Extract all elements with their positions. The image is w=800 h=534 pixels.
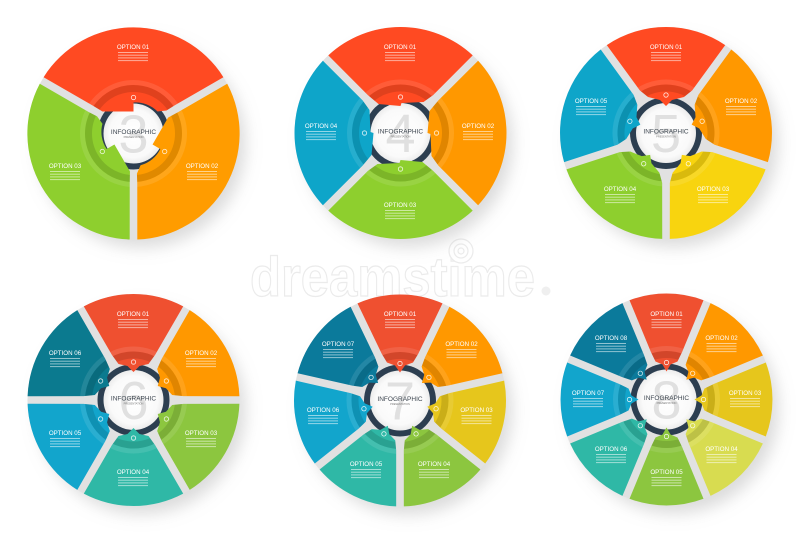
option 01: OPTION 01 <box>384 311 417 318</box>
option 03 <box>49 163 82 180</box>
option 04: OPTION 04 <box>305 123 338 130</box>
option 02: OPTION 02 <box>185 350 218 357</box>
option 01: OPTION 01 <box>117 311 150 318</box>
option 02 <box>445 341 478 358</box>
option 03: OPTION 03 <box>697 186 730 193</box>
option 02: OPTION 02 <box>462 123 495 130</box>
option 04 <box>418 461 451 478</box>
option 04: OPTION 04 <box>705 446 738 453</box>
option 03: OPTION 03 <box>185 430 218 437</box>
option 04 <box>117 469 150 486</box>
option 01 <box>117 44 150 61</box>
option 05: OPTION 05 <box>350 461 383 468</box>
chart 8 center text: 8 <box>651 370 682 430</box>
option 03 <box>185 430 218 447</box>
option 02 <box>725 98 758 115</box>
option 02 <box>185 350 218 367</box>
option 05 <box>350 461 383 478</box>
chart: 4 options <box>294 27 512 247</box>
chart 8 wheel <box>556 289 778 514</box>
option 03 <box>729 390 762 407</box>
option 06: OPTION 06 <box>307 407 340 414</box>
option 03: OPTION 03 <box>460 407 493 414</box>
option 06 <box>595 446 628 463</box>
chart 4 center text: 4 <box>385 104 416 164</box>
chart 3 center text: 3 <box>118 104 149 164</box>
chart 6 center text: 6 <box>118 371 149 431</box>
option 02 <box>462 123 495 140</box>
chart 3 center text <box>111 104 156 164</box>
option 01 <box>650 44 683 61</box>
option 05: OPTION 05 <box>575 98 608 105</box>
option 02: OPTION 02 <box>445 341 478 348</box>
option 02: OPTION 02 <box>186 163 219 170</box>
chart 5 wheel <box>547 27 785 254</box>
chart 6 center text <box>111 371 156 431</box>
chart: 6 options <box>16 294 251 514</box>
option 01 <box>117 311 150 328</box>
chart 7 center text: PRESENTATION <box>390 402 410 406</box>
chart 3 wheel <box>0 27 270 264</box>
option 01: OPTION 01 <box>650 44 683 51</box>
option 03 <box>460 407 493 424</box>
chart 4 wheel <box>294 27 512 247</box>
chart: 3 options <box>0 27 270 264</box>
chart 7 wheel <box>285 294 515 518</box>
chart 6 center text: INFOGRAPHIC <box>111 396 156 402</box>
option 04 <box>705 446 738 463</box>
option 04 <box>305 123 338 140</box>
option 03 <box>697 186 730 203</box>
option 06: OPTION 06 <box>595 446 628 453</box>
option 05 <box>575 98 608 115</box>
option 01 <box>650 311 683 328</box>
option 01: OPTION 01 <box>650 311 683 318</box>
watermark: dreamstime <box>250 245 535 308</box>
chart 5 center text: PRESENTATION <box>656 134 676 138</box>
option 01: OPTION 01 <box>117 44 150 51</box>
option 02 <box>186 163 219 180</box>
chart 7 center text: INFOGRAPHIC <box>377 396 423 403</box>
chart 8 center text: INFOGRAPHIC <box>644 395 689 402</box>
chart 3 center text: INFOGRAPHIC <box>111 129 156 136</box>
option 02: OPTION 02 <box>705 335 738 342</box>
option 04: OPTION 04 <box>117 469 150 476</box>
option 07: OPTION 07 <box>572 390 605 397</box>
option 01 <box>384 44 417 61</box>
chart 7 center text: 7 <box>385 372 415 432</box>
chart 6 center text: PRESENTATION <box>124 402 144 406</box>
chart 4 center text: PRESENTATION <box>391 134 411 138</box>
chart 5 center text: 5 <box>651 104 681 164</box>
option 03: OPTION 03 <box>729 390 762 397</box>
option 03: OPTION 03 <box>384 202 417 209</box>
chart 3 center text: PRESENTATION <box>124 135 144 139</box>
option 04 <box>604 186 637 203</box>
chart 7 center text <box>377 372 423 432</box>
chart 4 center text <box>378 104 423 164</box>
option 01 <box>384 311 417 328</box>
option 05 <box>650 469 683 486</box>
chart 8 center text <box>644 370 689 430</box>
option 06: OPTION 06 <box>49 350 82 357</box>
option 01: OPTION 01 <box>384 44 417 51</box>
option 04: OPTION 04 <box>604 186 637 193</box>
option 05 <box>49 430 82 447</box>
chart 8 center text: PRESENTATION <box>657 401 677 405</box>
chart 6 wheel <box>16 294 251 514</box>
chart: 5 options <box>547 27 785 254</box>
option 02: OPTION 02 <box>725 98 758 105</box>
chart: 8 options <box>556 289 778 514</box>
option 03 <box>384 202 417 219</box>
option 03: OPTION 03 <box>49 163 82 170</box>
option 05: OPTION 05 <box>650 469 683 476</box>
option 06 <box>307 407 340 424</box>
chart 5 center text: INFOGRAPHIC <box>643 128 689 136</box>
option 06 <box>49 350 82 367</box>
chart 4 center text: INFOGRAPHIC <box>378 128 423 136</box>
chart: 7 options <box>285 294 515 518</box>
option 02 <box>705 335 738 352</box>
option 04: OPTION 04 <box>418 461 451 468</box>
option 08: OPTION 08 <box>595 335 628 342</box>
option 08 <box>595 335 628 352</box>
option 07: OPTION 07 <box>322 341 355 348</box>
chart 5 center text <box>643 104 689 164</box>
option 07 <box>322 341 355 358</box>
option 05: OPTION 05 <box>49 430 82 437</box>
option 07 <box>572 390 605 407</box>
